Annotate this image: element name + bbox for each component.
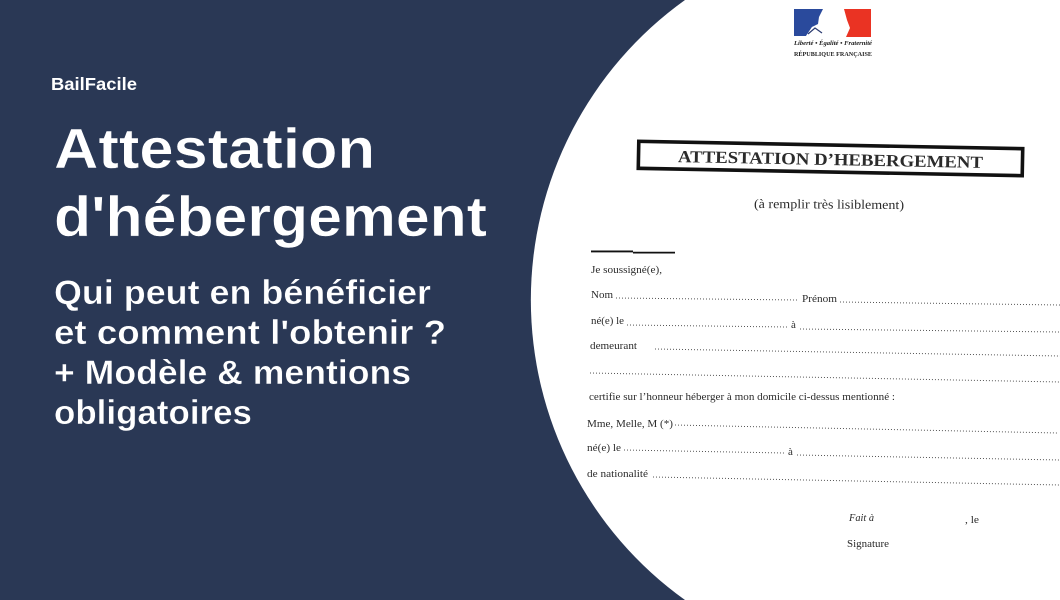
panel: document circle — [531, 0, 1060, 600]
form title box — [638, 141, 1023, 176]
title — [54, 117, 487, 249]
form subtitle: (à remplir très lisiblement) — [754, 196, 904, 212]
subtitle: + Modèle & mentions — [54, 354, 411, 392]
form body text: certifie sur l’honneur héberger à mon domicile ci-dessus mentionné : — [589, 391, 895, 403]
form body text: , le — [965, 514, 979, 526]
title: d'hébergement — [54, 185, 487, 249]
title: Attestation — [54, 117, 375, 181]
form body text: né(e) le — [591, 315, 624, 327]
form body text — [587, 264, 979, 550]
form body text: Nom — [591, 289, 613, 301]
subtitle: et comment l'obtenir ? — [54, 314, 446, 352]
form dotted lines — [590, 298, 1060, 485]
form body text: à — [788, 446, 793, 458]
icon: French Republic logo — [793, 9, 873, 58]
subtitle — [54, 274, 446, 432]
form body text: Je soussigné(e), — [591, 264, 662, 276]
form body text: de nationalité — [587, 468, 648, 480]
subtitle: obligatoires — [54, 394, 252, 432]
icon: French Republic logo: Liberté • Égalité • Fraternité — [793, 39, 873, 47]
form title box: ATTESTATION D’HEBERGEMENT — [678, 147, 984, 172]
brand name: BailFacile — [51, 74, 137, 94]
form body text: demeurant — [590, 340, 637, 352]
form body text: Mme, Melle, M (*) — [587, 418, 673, 430]
icon: French Republic logo: RÉPUBLIQUE FRANÇAISE — [794, 50, 872, 58]
form body text: à — [791, 319, 796, 331]
form body text: Signature — [847, 538, 889, 550]
form body text: Fait à — [848, 512, 874, 524]
form body text: né(e) le — [587, 442, 621, 454]
subtitle: Qui peut en bénéficier — [54, 274, 431, 312]
form rule — [591, 250, 675, 254]
form body text: Prénom — [802, 293, 837, 305]
